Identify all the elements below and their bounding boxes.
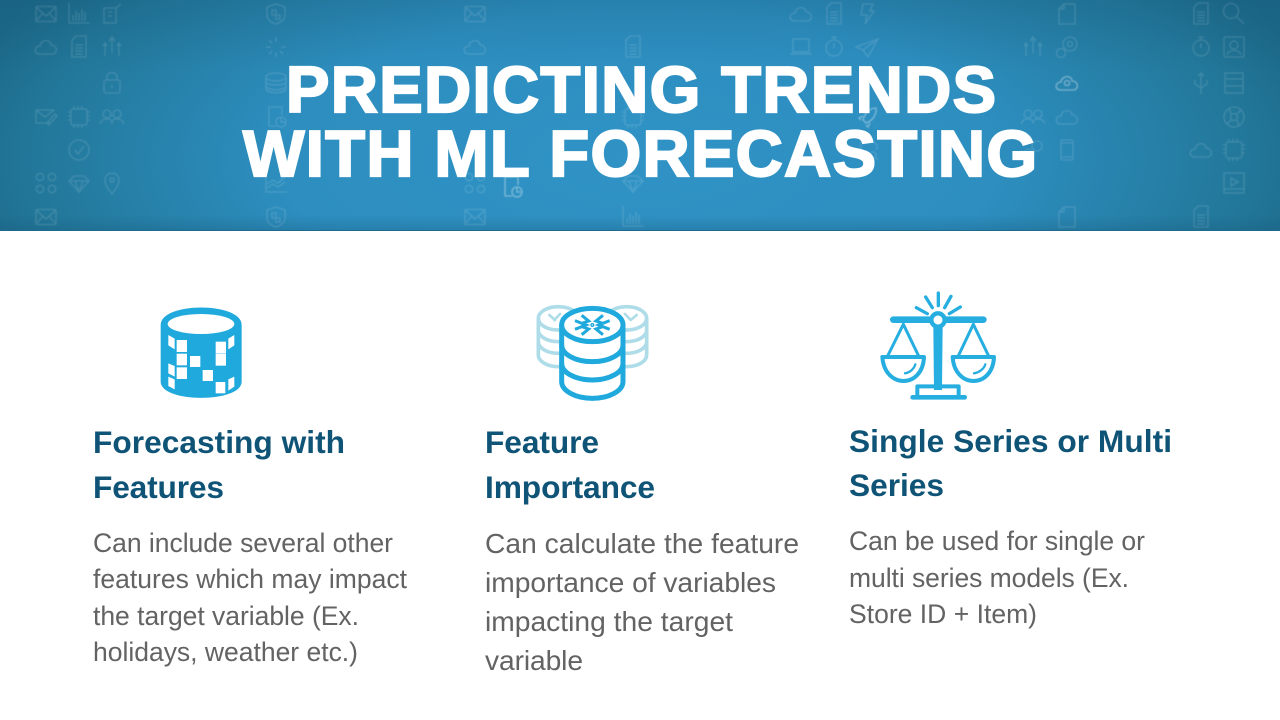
heading: Feature [485,424,599,460]
body text: impacting the target [485,605,733,637]
background icon pattern [35,3,1245,227]
heading [485,424,655,505]
body text: Can include several other [93,528,393,558]
header banner [0,0,1280,231]
title: WITH ML FORECASTING [243,117,1037,190]
title [243,53,1037,190]
title: PREDICTING TRENDS [286,53,996,126]
back disks [538,307,647,367]
heading: Series [849,467,944,503]
body text [849,526,1145,629]
panel: forecasting with features [93,307,408,667]
body text: holidays, weather etc.) [93,637,358,667]
right pan [958,324,989,357]
body text: the target variable (Ex. [93,601,359,631]
icon: balance scale [882,293,994,397]
heading: Importance [485,469,655,505]
heading: Single Series or Multi [849,423,1172,459]
body text: Can be used for single or [849,526,1145,556]
heading: Forecasting with [93,424,345,460]
base [917,386,959,397]
heading [93,424,345,505]
body text: Can calculate the feature [485,527,799,559]
body text: multi series models (Ex. [849,563,1129,593]
body text: importance of variables [485,566,776,598]
heading: Features [93,469,224,505]
rays [916,293,960,314]
body text: features which may impact [93,564,408,594]
icon: database grid [161,307,242,398]
icon: snowflake database stack [538,307,647,398]
body text [485,527,799,676]
body text: Store ID + Item) [849,599,1037,629]
main stack [562,308,623,398]
panel: feature importance [485,307,799,676]
body text: variable [485,644,583,676]
snowflake [575,315,610,335]
highlighted background icons [505,77,1077,197]
beam and post [893,310,983,330]
heading [849,423,1172,503]
panel: single series or multi series [849,293,1172,629]
left pan [887,324,919,357]
body text [93,528,408,667]
